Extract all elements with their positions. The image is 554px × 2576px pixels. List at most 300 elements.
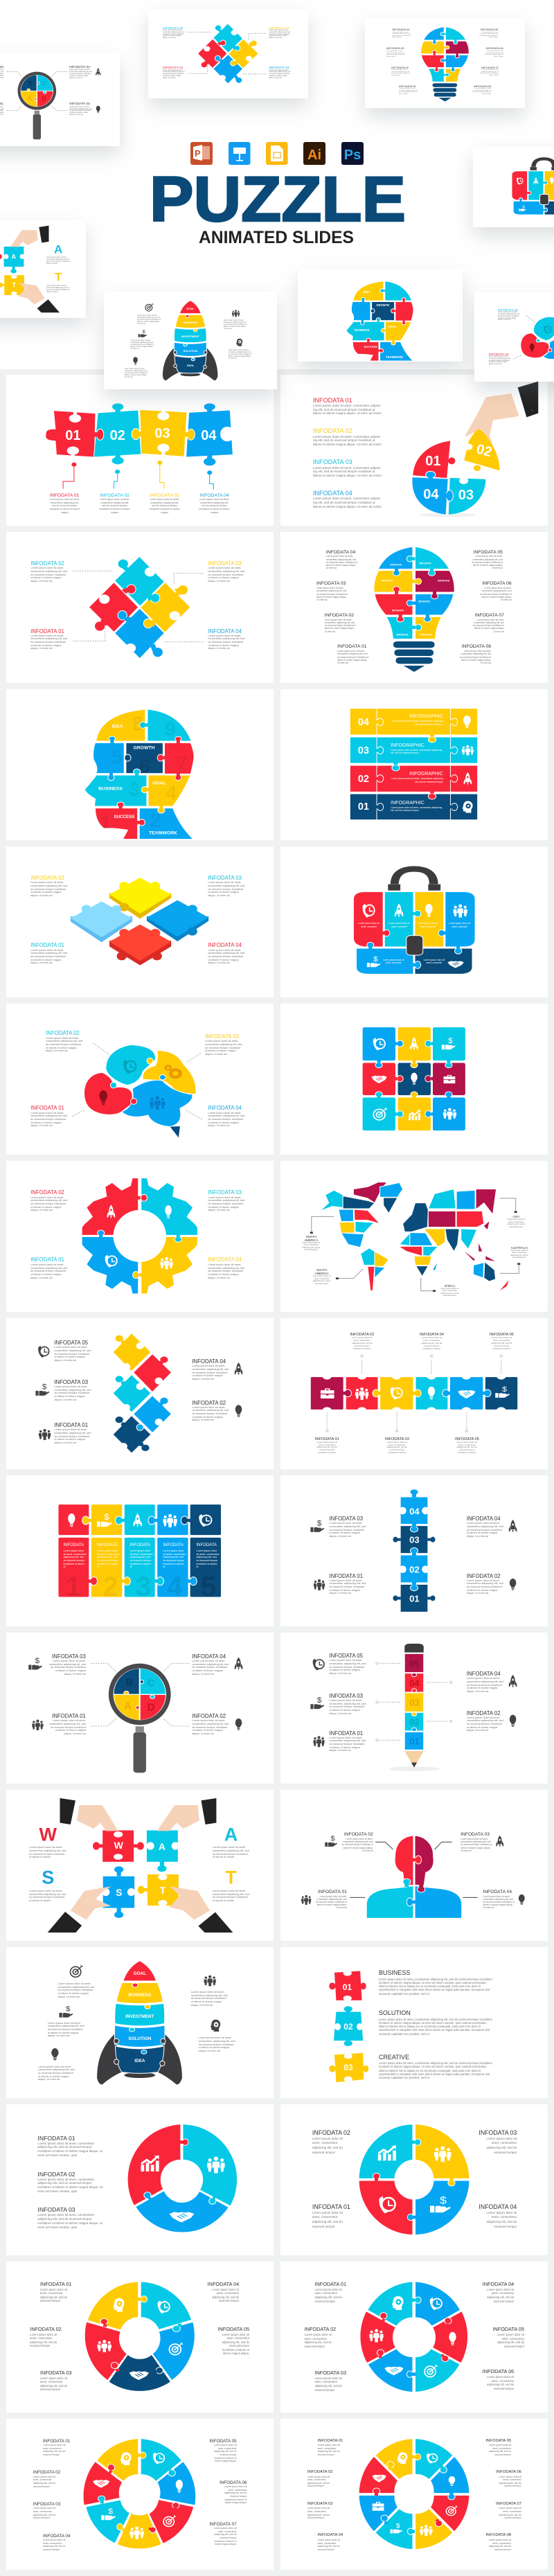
text: infodata 06: amet, consectetur	[503, 2478, 521, 2481]
text: infodata 03: amet, consectetur	[492, 2141, 517, 2144]
text: INFODATA 02	[498, 308, 518, 312]
label teamwork: TEAMWORK	[149, 831, 177, 836]
text: infodata 03	[33, 2502, 62, 2520]
label: GOAL	[186, 307, 195, 310]
icon: hand	[310, 1520, 324, 1532]
text: infodata 05: INFODATA 05	[329, 1653, 363, 1659]
text: infodata 04: amet, consectetur	[492, 2291, 514, 2295]
panel: six part donut	[280, 2262, 548, 2413]
text: infodata 02	[37, 2171, 104, 2194]
icon: bulb	[99, 1090, 107, 1105]
icon: rocket	[464, 772, 472, 785]
label: IDEA	[363, 290, 370, 294]
icon: hand	[97, 1513, 112, 1527]
letter B: B	[125, 1676, 133, 1688]
title: PUZZLE	[150, 164, 406, 235]
text: infodata 01	[318, 2438, 346, 2456]
panel: seven part donut	[6, 2419, 274, 2570]
text: Lorem ipsum dolor sit amet, consectetur adipiscing elit, sed do eiusmod tempor incididunt ut labore et dolore magna aliqua. Ut enim ad	[191, 1990, 228, 2007]
illustration: head silhouette of pieces	[84, 709, 194, 840]
text: infodata 01: adipiscing elit, sed do	[314, 2295, 342, 2299]
text: INFODATA 01	[163, 66, 183, 69]
text: infodata 01: Lorem ipsum dolor sit amet, consectetur adipiscing elit, sed do eiusmod tempor incididunt ut labore et dolore magna aliqua. Ut enim ad	[49, 1718, 86, 1735]
text row 1: INFOGRAPHIC	[391, 801, 425, 806]
text: north america: Lorem ipsum dolor sit amet, consectetur adipiscing elit, sed do eiusmod tempor	[303, 1241, 320, 1251]
text: infodata 02: ing elit, sed do eiusmod tempor incididunt ut	[313, 438, 375, 442]
text: infodata 04: INFODATA 04	[467, 1516, 501, 1522]
text: infodata 02	[312, 2129, 355, 2155]
faint number 2: 2	[102, 1572, 118, 1602]
text: infodata 05: Lorem ipsum dolor sit amet, consectetur adipiscing elit, sed do eiusmod tempor incididunt ut labore et dolore magna aliqua. Ut enim ad	[472, 555, 503, 569]
text: infodata 03: labore et dolore magna aliqua. Ut enim ad minim	[313, 474, 382, 477]
text	[479, 66, 499, 76]
text: infodata 01	[40, 2282, 78, 2303]
text: infodata 02: Lorem ipsum dolor sit amet, consectetur adipiscing elit, sed do eiusmod tempor incididunt ut labore et dolore magna aliqua. Ut enim ad	[192, 1718, 229, 1735]
text: infodata 04: Lorem ipsum dolor sit amet, consectetur adipiscing elit, sed do eiusmod tempor incididunt ut labore et dolore magna aliqua. Ut enim ad	[208, 1111, 244, 1127]
text: infodata 05: amet, consectetur	[226, 2336, 249, 2340]
text: Lorem ipsum dolor sit amet, consectetur adipiscing elit, sed do eiusmod tempor incididunt ut labore et dolore	[472, 88, 491, 95]
icon: bulb	[519, 1894, 525, 1905]
text: infodata 03: INFODATA 03	[479, 2129, 517, 2136]
text: australia	[508, 1246, 530, 1259]
panel: four part donut	[280, 2104, 548, 2255]
text: infodata 07: eiusmod tempor	[505, 2516, 521, 2519]
text: infodata 01: INFODATA 01	[50, 493, 79, 497]
text: Lorem ipsum dolor sit amet, consectet	[383, 959, 404, 964]
text: infodata 04: eiusmod tempor	[494, 2225, 517, 2228]
text: south america: SOUTH	[316, 1268, 327, 1272]
text: infodata 03: INFODATA 03	[208, 875, 242, 881]
text: infodata 04: amet, consectetur	[492, 2215, 517, 2219]
text: infodata 01: adipiscing elit, sed do	[43, 2450, 65, 2453]
text: infodata 04: INFODATA 04	[208, 628, 242, 634]
text: infodata 03: INFODATA 03	[385, 1437, 409, 1441]
text column 1: INFODATA	[64, 1543, 84, 1547]
text: infodata 03: Lorem ipsum dolor sit amet, consectetur adipiscing elit, sed do eiusmod tempor incididunt ut labore et dolore magna aliqua. Ut enim ad	[205, 1039, 242, 1056]
text: infodata 01: INFODATA 01	[30, 1105, 64, 1111]
text: infodata 05	[487, 2327, 524, 2349]
text column 1: Lorem ipsum dolor sit amet, consectetur adipiscing elit, sed do eiusmod tempor incididunt ut labore et	[64, 1549, 87, 1568]
text: infodata 04: INFODATA 04	[479, 2203, 517, 2210]
text: infodata 03: eiusmod tempor	[494, 2151, 517, 2154]
chart: five column puzzle	[6, 1475, 274, 1626]
text: infodata 03: adipiscing elit, sed do	[486, 2146, 517, 2149]
magnifier graphic	[0, 53, 120, 146]
icon: rocket	[134, 1513, 142, 1527]
illustration: pencil puzzle	[280, 1633, 548, 1784]
text: infodata 02	[305, 2327, 341, 2349]
text: australia: Lorem ipsum dolor sit amet, consectetur adipiscing elit, sed do eiusmod tempor	[510, 1250, 528, 1259]
text	[472, 85, 491, 95]
icon: chart	[409, 1110, 420, 1120]
label: IDEA	[187, 364, 194, 367]
text: infodata 07: INFODATA 07	[475, 613, 504, 618]
icon: rocket	[410, 1037, 418, 1051]
text A: Lorem ipsum dolor sit amet, consectetur adipiscing elit, sed do eiusmod tempor incididunt ut labore et dolore	[46, 256, 70, 265]
text: Lorem ipsum dolor sit amet, consectetur adipiscing elit, sed do eiusmod tempor incididunt ut labore et dolore magna aliqua. Ut enim ad	[125, 368, 148, 378]
label: INFODATA	[392, 609, 404, 612]
text: africa: Lorem ipsum dolor sit amet, consectetur adipiscing elit, sed do eiusmod tempor	[441, 1288, 458, 1297]
text: business: Lorem ipsum dolor sit amet, consectetur adipiscing elit, sed do eiusmod tempor incididunt ut labore et dolore magna aliqua. Ut enim ad minim veniam, quis nostrud exercitation ullamco laboris nisi ut aliquip ex ea commodo consequat. Duis aute irure dolor in reprehenderit in voluptate velit esse cillum dolore eu fugiat nulla pariatur. Excepteur sint occaecat cupidatat non proident, sunt in	[379, 1978, 492, 1996]
text row 1	[391, 801, 442, 812]
icon: Illustrator	[303, 142, 325, 165]
panel: three part donut	[6, 2104, 274, 2255]
text: infodata 01: Lorem ipsum dolor sit amet, consectetur adipiscing elit, sed do eiusmod tempor incididunt ut labore et dolore magna aliqua. Ut enim ad	[30, 634, 67, 650]
number 01: 01	[343, 1982, 352, 1992]
text: australia: AUSTRALIA	[511, 1246, 528, 1250]
faint number 4: 4	[166, 782, 177, 803]
text: infodata 04: Lorem ipsum dolor sit	[486, 2211, 517, 2214]
text: infodata 03: INFODATA 03	[52, 1653, 86, 1660]
heading T: T	[225, 1867, 237, 1888]
icon: people	[204, 1975, 216, 1987]
text: infodata 03: eiusmod tempor	[40, 2388, 60, 2391]
text column 2	[97, 1541, 120, 1569]
illustration: gear of four pieces	[6, 1161, 274, 1312]
text: infodata 03: amet, consectetur	[33, 2510, 52, 2513]
letter D: D	[148, 1701, 155, 1713]
icon: clock	[158, 2300, 170, 2313]
text: infodata 06: INFODATA 06	[482, 581, 512, 586]
icon: target	[446, 2505, 458, 2516]
text: infodata 03: eiusmod tempor	[314, 2388, 335, 2392]
icon: clock	[313, 1658, 325, 1671]
text: infodata 04: Lorem ipsum dolor sit amet, consectetur adipiscing elit, sed do eiusmod tempor incididunt ut labore et dolore magna aliqua. Ut enim ad	[467, 1521, 503, 1538]
text: infodata 06: amet, consectetur	[228, 2489, 247, 2491]
text: infodata 04	[318, 2533, 346, 2551]
text: INFODATA 02	[163, 26, 183, 30]
thumbnail card: brain slide	[474, 292, 554, 382]
icon: bulb	[449, 2476, 455, 2486]
text: INFODATA 02	[391, 66, 409, 69]
text: infodata 03: Lorem ipsum dolor sit	[486, 2137, 517, 2140]
text: infodata 01: amet, consectetur	[40, 2291, 63, 2295]
text: infodata 02: Lorem ipsum dolor sit amet, consectetur adipiscing elit, sed do eiusmod tempor incididunt ut labore et dolore magna aliqua. Ut enim ad	[325, 619, 356, 633]
text: infodata 04: INFODATA 04	[313, 490, 352, 497]
text: infodata 07: adipiscing elit, sed do	[499, 2513, 521, 2516]
text: infodata 02: Lorem ipsum dolor sit amet, consectetur adipiscing elit, sed do eiusmod tempor incididunt ut labore et dolore magna aliqua. Ut enim ad	[46, 1036, 82, 1052]
text: creative	[379, 2054, 492, 2079]
rocket graphic	[104, 292, 277, 389]
text: infodata 03: eiusmod tempor	[307, 2516, 324, 2519]
text: north america: NORTH	[306, 1234, 316, 1238]
text: infodata 05: eiusmod tempor	[229, 2344, 249, 2347]
text	[484, 47, 503, 57]
text: infodata 02: INFODATA 02	[325, 613, 354, 618]
letter C: C	[148, 1677, 155, 1689]
icon: people	[434, 2146, 451, 2162]
text: infodata 02: Lorem ipsum dolor sit	[307, 2476, 330, 2478]
icon: chart	[141, 2156, 159, 2171]
text: infodata 02: INFODATA 02	[307, 2470, 333, 2474]
letter A: A	[124, 1700, 132, 1712]
illustration: magnifying glass puzzle	[6, 1633, 274, 1784]
text: Lorem ipsum dolor sit amet, consectetur adipiscing elit, sed do eiusmod tempor incididunt ut labore et dolore magna aliqua. Ut enim ad	[69, 106, 92, 116]
text: infodata 05: incididunt ut labore et	[214, 2457, 237, 2460]
text: infodata 05: eiusmod tempor	[494, 2453, 511, 2456]
letter A: A	[27, 94, 32, 101]
text: infodata 04: INFODATA 04	[420, 1333, 444, 1337]
text: infodata 03: INFODATA 03	[150, 493, 179, 497]
panel: SWOT hands	[6, 1790, 274, 1941]
icon: head	[462, 801, 473, 813]
panel: light bulb puzzle	[280, 532, 548, 683]
text: africa	[438, 1284, 461, 1297]
text: infodata 05: INFODATA 05	[473, 550, 503, 555]
text: infodata 04: amet, consectetur	[43, 2542, 62, 2545]
icon: target	[163, 2515, 177, 2527]
icon: handshake	[371, 1076, 387, 1083]
text: infodata 07: INFODATA 07	[209, 2522, 237, 2527]
heading A: A	[54, 243, 62, 256]
text: infodata 04: INFODATA 04	[483, 2281, 514, 2287]
text: infodata 03: amet, consectetur	[307, 2510, 326, 2513]
text: infodata 07: incididunt ut labore et	[214, 2540, 237, 2543]
text: infodata 06: INFODATA 06	[496, 2470, 521, 2474]
text	[163, 66, 185, 79]
text: infodata 03: Lorem ipsum dolor sit amet, consectetur adipiscing elit, sed do eiusmod tempor incididunt ut labore et dolore magna aliqua. Ut enim ad	[329, 1698, 366, 1715]
text: INFODATA 01	[489, 353, 509, 356]
text: Lorem ipsum dolor sit amet, consectetur adipiscing elit, sed do eiusmod tempor incididunt ut labore et dolore magna aliqua. Ut enim ad	[269, 70, 291, 79]
text: infodata 03: Lorem ipsum dolor sit amet, consectetur adipiscing elit, sed do eiusmod tempor incididunt ut labore et dolore magna aliqua. Ut enim ad	[49, 1659, 86, 1676]
icon: clock	[105, 1255, 118, 1268]
chart: diamond of four pieces	[72, 557, 204, 658]
panel: diamond puzzle	[6, 532, 274, 683]
panel: head puzzle	[6, 689, 274, 840]
label business: BUSINESS	[98, 787, 123, 792]
text: infodata 01: amet, consectetur	[318, 2447, 337, 2450]
text: infodata 08: Lorem ipsum dolor sit amet, consectetur adipiscing elit, sed do eiusmod tempor incididunt ut labore et dolore magna aliqua. Ut enim ad	[460, 650, 491, 664]
panel: gear puzzle	[6, 1161, 274, 1312]
letter in piece W: W	[114, 1840, 123, 1851]
icon: bulb	[428, 1387, 435, 1399]
number 05: 05	[409, 1658, 420, 1669]
text: infodata 05: Lorem ipsum dolor sit	[497, 2333, 524, 2336]
text: infodata 07: amet, consectetur	[503, 2510, 521, 2513]
icon: head	[397, 2452, 407, 2464]
text: infodata 02: amet, consectetur	[33, 2478, 52, 2481]
illustration: rocket puzzle	[6, 1947, 274, 2098]
text: infodata 01: Lorem ipsum dolor sit	[43, 2444, 65, 2446]
faint number 9: 9	[165, 718, 176, 740]
panel: world map	[280, 1161, 548, 1312]
illustration: brain of four lobes	[6, 1004, 274, 1155]
icon: bulb	[176, 2480, 183, 2493]
icon: handshake	[447, 961, 464, 968]
icon: bulb	[510, 1579, 516, 1590]
text: infodata 02	[313, 427, 382, 446]
faint number 2: 2	[150, 810, 161, 831]
icon: people	[369, 2329, 384, 2343]
text: infodata 01: amet, consectetur	[314, 2291, 337, 2295]
text: infodata 05: INFODATA 05	[492, 2326, 524, 2332]
icon: clock	[199, 1514, 212, 1527]
text: infodata 03: INFODATA 03	[37, 2206, 75, 2213]
text: infodata 03: amet, consectetur	[40, 2380, 63, 2383]
text: infodata 05: adipiscing elit, sed do	[489, 2450, 511, 2453]
illustration: four hands and SWOT pieces	[6, 1790, 274, 1941]
text: infodata 05: amet, consectetur	[492, 2447, 511, 2450]
thumbnail card: rocket slide	[104, 292, 277, 389]
text: infodata 01: INFODATA 01	[329, 1730, 363, 1736]
text column 3	[130, 1541, 153, 1569]
text: infodata 01	[312, 2203, 355, 2229]
text: infodata 02: adipiscing elit, sed do	[307, 2482, 330, 2485]
label: INFODATA	[420, 562, 431, 565]
icon: bulb	[449, 2332, 456, 2345]
icon: target	[70, 1964, 83, 1978]
text: infodata 01: INFODATA 01	[318, 1890, 347, 1894]
icon: people	[301, 1895, 311, 1905]
text: infodata 07: INFODATA 07	[496, 2502, 521, 2506]
text: infodata 01: Lorem ipsum dolor sit amet, consectetur adipiscing elit, sed do eiusmod tempor incididunt ut labore et dolore magna aliqua. Ut enim ad	[329, 1579, 366, 1595]
text S: Lorem ipsum dolor sit amet, consectetur adipiscing elit, sed do eiusmod tempor incididunt ut labore et dolore	[29, 1889, 66, 1902]
subtitle: ANIMATED SLIDES	[199, 228, 354, 247]
text row 2: INFOGRAPHIC	[409, 772, 443, 776]
number 01: 01	[409, 1593, 420, 1604]
text: infodata 06: eiusmod tempor	[230, 2495, 247, 2498]
text: infodata 05	[208, 2439, 237, 2463]
icon: handshake	[458, 1390, 476, 1398]
label idea: IDEA	[112, 725, 123, 729]
text: INFODATA 04	[69, 66, 90, 69]
text: infodata 01: eiusmod tempor	[43, 2453, 60, 2456]
label goal: GOAL	[152, 781, 166, 786]
text	[399, 85, 418, 95]
text: infodata 01: INFODATA 01	[337, 644, 367, 649]
text: infodata 03	[307, 2502, 337, 2520]
text: infodata 01: eiusmod tempor	[314, 2300, 335, 2303]
header: title and app icons	[0, 0, 554, 249]
text	[269, 66, 291, 79]
text: infodata 03: INFODATA 03	[54, 1379, 88, 1385]
text	[489, 353, 511, 366]
number 01: 01	[358, 801, 369, 812]
text: infodata 03	[313, 459, 382, 477]
label: SOLUTION	[184, 349, 197, 353]
text: infodata 06: incididunt ut labore et	[224, 2498, 247, 2501]
text: infodata 03: Lorem ipsum dolor sit amet, consectetur adipiscing elit, sed do eiusmod tempor incididunt ut labore et dolore magna	[150, 498, 180, 514]
icon: Keynote	[229, 142, 251, 165]
text: infodata 02: adipiscing elit, sed do	[305, 2340, 332, 2344]
text: infodata 02: INFODATA 02	[30, 875, 64, 881]
text: infodata 02: Lorem ipsum dolor sit amet, consectetur adipiscing elit, sed do eiusmod tempor incididunt ut labore et dolore magna aliqua. Ut enim ad	[30, 1196, 67, 1211]
text: infodata 03	[314, 2370, 352, 2392]
text: solution: SOLUTION	[379, 2009, 411, 2016]
text: infodata 01: adipiscing elit, sed do	[312, 2220, 343, 2223]
text: infodata 03: Lorem ipsum dolor sit amet, consectetur adipiscing elit, sed do eiusmod tempor incididunt ut labore et dolore magna aliqua. Ut enim ad	[54, 1385, 91, 1401]
text column 2: INFODATA	[97, 1543, 118, 1547]
text: infodata 01: INFODATA 01	[313, 397, 352, 404]
text: infodata 05: adipiscing elit, sed do	[222, 2340, 249, 2344]
icon: people	[443, 1108, 456, 1119]
text: infodata 03: Lorem ipsum dolor sit amet, consectetur adipiscing elit, sed do eiusmod tempor incididunt ut labore et dolore magna aliqua. Ut enim ad	[208, 880, 244, 897]
text: Lorem ipsum dolor sit amet, consectetur adipiscing elit, sed do eiusmod tempor incididunt ut labore et dolore magna aliqua. Ut enim ad	[131, 339, 154, 350]
icon: gears	[164, 1065, 182, 1078]
number 01: 01	[425, 454, 441, 469]
label idea: IDEA	[134, 2059, 145, 2063]
text: infodata 02: INFODATA 02	[305, 2326, 336, 2332]
icon: rocket	[235, 1362, 242, 1376]
icon: handshake	[170, 2212, 194, 2222]
text: infodata 01: Lorem ipsum dolor sit amet, consectetur adipiscing elit, sed do eiusmod tempor incididunt ut labore et dolore magna aliqua. Ut enim ad	[30, 948, 67, 964]
text: infodata 02: Lorem ipsum dolor sit amet, consectetur adipiscing elit, sed do eiusmod tempor incididunt ut labore et dolore magna aliqua. Ut enim ad minim veniam, quis	[37, 2178, 102, 2193]
text: infodata 02: adipiscing elit, sed do	[312, 2146, 343, 2149]
panel: brain puzzle	[6, 1004, 274, 1155]
text column 3: INFODATA	[130, 1543, 150, 1547]
icon: clock	[430, 2298, 443, 2310]
text: infodata 05: INFODATA 05	[217, 2326, 249, 2332]
text	[498, 308, 520, 321]
text: infodata 02: adipiscing elit, sed do	[33, 2482, 55, 2485]
text: infodata 01: eiusmod tempor	[312, 2225, 335, 2228]
chart: grid of nine pieces	[280, 1004, 548, 1155]
text: infodata 05: dolore magna aliqua.	[215, 2460, 237, 2462]
label solution: SOLUTION	[128, 2036, 151, 2041]
label: GROWTH	[376, 303, 389, 307]
text: INFODATA 03	[269, 26, 289, 30]
text: INFODATA 07	[481, 66, 499, 69]
text: infodata 01: amet, consectetur	[312, 2215, 337, 2219]
text: infodata 05: incididunt ut labore et	[222, 2348, 249, 2352]
icon: people	[98, 2340, 111, 2352]
chart: donut of six pieces	[280, 2262, 548, 2413]
text: Lorem ipsum dolor sit amet, consectet	[418, 922, 438, 928]
number 03: 03	[358, 745, 369, 756]
text: infodata 03	[474, 2129, 517, 2155]
text: Lorem ipsum dolor sit amet, consectetur adipiscing elit, sed do eiusmod tempor incididunt ut labore et dolore magna aliqua. Ut enim ad	[38, 2065, 75, 2081]
faint number 1: 1	[66, 1572, 81, 1602]
icon: hand	[367, 956, 380, 967]
icon: clock	[363, 904, 375, 918]
text: infodata 01: Lorem ipsum dolor sit amet, consectetur adipiscing elit, sed do eiusmod tempor incididunt ut labore et dolore magna	[49, 498, 80, 514]
text: Lorem ipsum dolor sit amet, consectet	[358, 922, 379, 928]
icon: bulb	[51, 2048, 58, 2060]
icon: handshake	[372, 2475, 386, 2482]
number 02: 02	[475, 441, 494, 460]
text row 3: INFOGRAPHIC	[391, 743, 425, 748]
text: infodata 01: Lorem ipsum dolor sit amet, consectetur adipiscing elit, sed do eiusmod tempor incididunt ut labore	[317, 1441, 337, 1454]
icon: hand	[101, 2507, 116, 2520]
text: infodata 04	[313, 490, 382, 508]
text: infodata 03: INFODATA 03	[461, 1832, 490, 1837]
text: infodata 02: Lorem ipsum dolor sit	[312, 2137, 343, 2140]
text: infodata 02: INFODATA 02	[30, 1189, 64, 1196]
text: infodata 05: eiusmod tempor	[220, 2453, 237, 2456]
text: infodata 03: Lorem ipsum dolor sit amet, consectetur adipiscing elit, sed do eiusmod tempor incididunt ut labore	[387, 1441, 407, 1454]
text: infodata 04: Lorem ipsum dolor sit amet, consectetur adipiscing elit, sed do eiusmod tempor incididunt ut labore et dolore magna aliqua. Ut enim ad	[208, 948, 244, 964]
text: infodata 04: eiusmod tempor	[318, 2548, 334, 2551]
text: infodata 05: Lorem ipsum dolor sit amet, consectetur adipiscing elit, sed do eiusmod tempor incididunt ut labore	[457, 1441, 477, 1454]
text: infodata 04	[420, 1333, 444, 1351]
brain graphic	[474, 292, 554, 382]
icon: clock	[373, 1038, 386, 1050]
text: infodata 05	[455, 1437, 479, 1455]
text: solution: Lorem ipsum dolor sit amet, consectetur adipiscing elit, sed do eiusmod tempor incididunt ut labore et dolore magna aliqua. Ut enim ad minim veniam, quis nostrud exercitation ullamco laboris nisi ut aliquip ex ea commodo consequat. Duis aute irure dolor in reprehenderit in voluptate velit esse cillum dolore eu fugiat nulla pariatur. Excepteur sint occaecat cupidatat non proident, sunt in	[379, 2018, 492, 2036]
text: infodata 06: eiusmod tempor	[505, 2485, 521, 2487]
text: infodata 04: Lorem ipsum dolor sit amet, consectetur adipiscing elit, sed do eiusmod tempor incididunt ut labore et dolore magna aliqua. Ut enim ad	[483, 1895, 515, 1909]
number 02: 02	[409, 1716, 420, 1727]
text: infodata 03: INFODATA 03	[208, 1189, 242, 1196]
text: Lorem ipsum dolor sit amet, consectetur adipiscing elit, sed do eiusmod tempor incididunt ut labore et dolore magna aliqua. Ut enim ad	[489, 356, 510, 365]
text: infodata 03: adipiscing elit, sed do	[33, 2514, 55, 2516]
faint number 6: 6	[139, 756, 150, 777]
text row 3	[391, 743, 442, 754]
text: infodata 04: eiusmod tempor	[219, 2299, 239, 2302]
number 04: 04	[201, 428, 216, 443]
text: infodata 02: labore et dolore magna aliqua. Ut enim ad minim	[313, 443, 382, 446]
label: INFODATA	[420, 634, 432, 637]
